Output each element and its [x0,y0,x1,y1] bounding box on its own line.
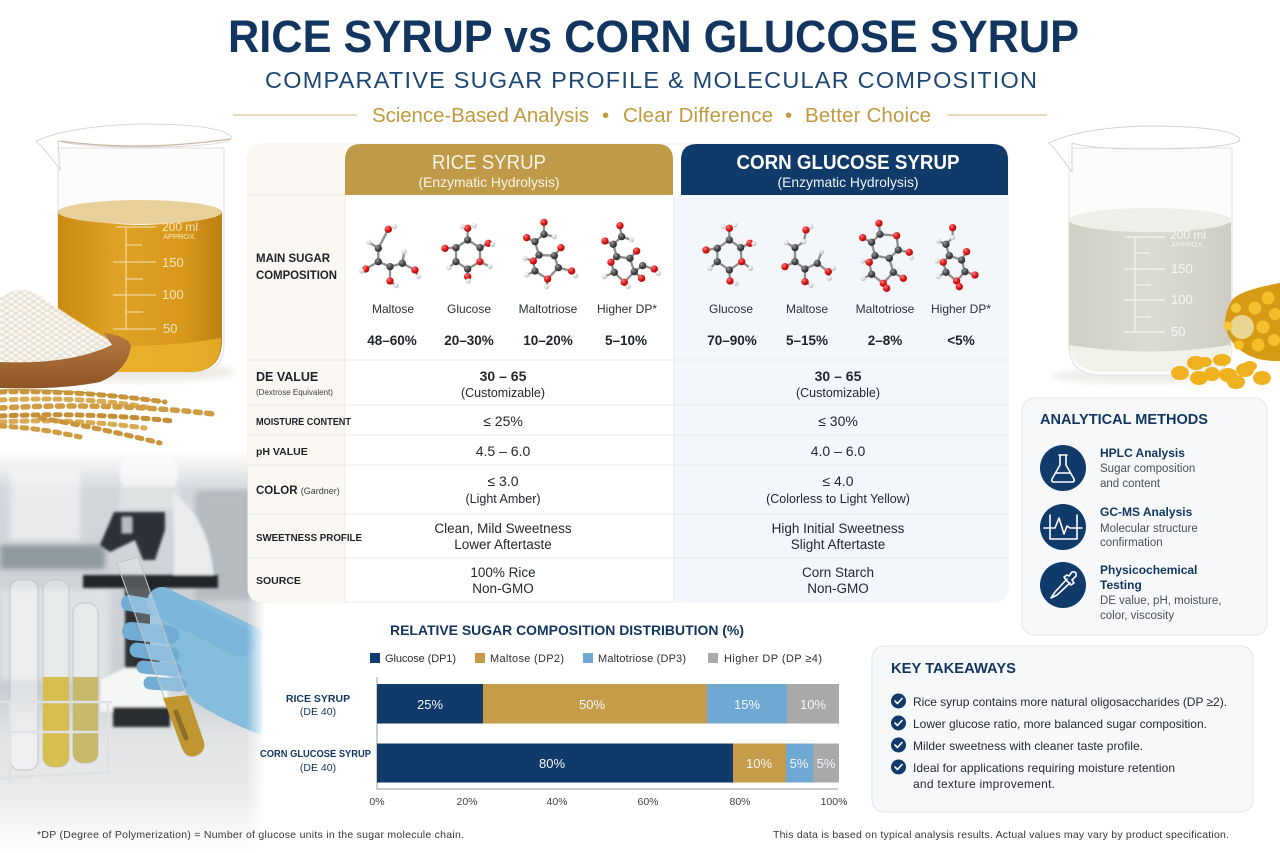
row: moisture content: MOISTURE CONTENT [256,416,351,428]
rice syrup header: RICE SYRUP [432,152,546,174]
bar: rice syrup [377,684,839,724]
sugar names and percentages: 10–20% [523,333,573,348]
corn glucose syrup header [681,144,1008,195]
row labels: CORN GLUCOSE SYRUP [260,748,371,760]
row: sweetness profile: High Initial Sweetness [772,521,905,536]
row: DE value: 30 – 65 [480,368,527,384]
row: source [256,565,874,596]
row: moisture content: ≤ 25% [483,413,523,429]
row: sweetness profile: Lower Aftertaste [454,537,552,552]
takeaway 2: Lower glucose ratio, more balanced sugar composition. [913,717,1207,731]
rice syrup header: (Enzymatic Hydrolysis) [418,174,560,190]
row: source: Non-GMO [472,581,534,596]
icon: flask [1040,445,1086,491]
axis tick labels [369,796,847,808]
molecule: corn higher DP [935,224,979,290]
sugar names and percentages: 20–30% [444,333,494,348]
sugar names and percentages [367,302,991,348]
bar: corn glucose syrup: 80% [539,756,565,771]
molecule: corn maltose [781,224,836,288]
legend: Maltotriose (DP3) [598,653,686,665]
legend: Higher DP (DP ≥4) [724,653,822,665]
tagline [233,104,1047,127]
sugar names and percentages: Higher DP* [597,302,657,316]
subtitle: COMPARATIVE SUGAR PROFILE & MOLECULAR COMPOSITION [265,67,1037,93]
wooden bowl [0,333,131,388]
axis tick labels: 60% [637,796,659,808]
icon: check 3 [891,738,906,752]
row: DE value: DE VALUE [256,370,318,384]
axis tick labels: 80% [729,796,751,808]
row: color [256,473,910,506]
row: pH value: 4.5 – 6.0 [476,443,530,459]
corn cob [1224,283,1280,361]
row: pH value: pH VALUE [256,446,308,458]
row: source: Non-GMO [807,581,869,596]
chart title: RELATIVE SUGAR COMPOSITION DISTRIBUTION (%) [390,623,744,638]
row: sweetness profile: Slight Aftertaste [791,537,885,552]
rice stalks [0,390,214,443]
photo: rice syrup beaker with rice: 200 ml [162,220,198,234]
row: DE value: (Dextrose Equivalent) [256,388,333,397]
bar: corn glucose syrup: 5% [790,756,809,771]
molecule: rice maltose [359,224,421,288]
row: color: ≤ 3.0 [487,473,519,489]
molecule: corn maltotriose [859,220,914,292]
row: pH value: 4.0 – 6.0 [811,443,865,459]
legend [370,653,822,665]
corn glucose syrup header: (Enzymatic Hydrolysis) [778,174,918,190]
panel: key takeaways: KEY TAKEAWAYS [891,660,1016,677]
sugar names and percentages: Maltose [786,302,828,316]
panel: analytical methods: ANALYTICAL METHODS [1040,411,1208,428]
sugar names and percentages: Maltose [372,302,414,316]
bar chart: relative sugar composition distribution [260,623,847,808]
row: moisture content [256,413,858,429]
row: main sugar composition: COMPOSITION [256,270,337,282]
axis tick labels: 0% [369,796,385,808]
bar: corn glucose syrup: 10% [746,756,772,771]
row: DE value [256,368,880,400]
photo: rice syrup beaker with rice: 150 [162,255,184,270]
rice syrup header [345,144,673,195]
row: sweetness profile [256,521,905,552]
title: RICE SYRUP vs CORN GLUCOSE SYRUP [228,11,1079,62]
sugar names and percentages: 5–15% [786,333,828,348]
label column background [248,144,345,602]
axis tick labels: 40% [546,796,568,808]
method: GC-MS [1100,505,1198,549]
photo: rice syrup beaker with rice: 100 [162,287,184,302]
row: source: 100% Rice [470,565,536,580]
photo: rice syrup beaker with rice: APPROX. [163,232,196,241]
photo: corn syrup beaker with corn: 200 ml [1170,228,1206,242]
sugar names and percentages: 5–10% [605,333,647,348]
row: DE value: (Customizable) [461,386,545,400]
axis tick labels: 100% [821,796,847,808]
row: source: SOURCE [256,575,301,587]
method: GC-MS: Molecular structure [1100,523,1198,535]
comparison table [248,144,1008,602]
gloved hand [129,600,262,735]
row: source: Corn Starch [802,565,874,580]
method: physicochemical testing: Testing [1100,578,1142,592]
tagline: Science-Based Analysis [372,104,589,127]
axis tick labels: 20% [456,796,478,808]
corn kernels [1171,354,1271,389]
panel: analytical methods [1022,398,1267,635]
row: DE value: 30 – 65 [815,368,862,384]
row: sweetness profile: SWEETNESS PROFILE [256,532,362,544]
row: main sugar composition [256,219,991,348]
method: HPLC: Sugar composition [1100,463,1195,475]
sugar names and percentages: 48–60% [367,333,417,348]
photo: corn syrup beaker with corn: 50 [1171,324,1185,339]
molecule: rice maltotriose [522,219,578,289]
molecule: rice higher DP [601,222,661,289]
photo: corn syrup beaker with corn: APPROX. [1171,240,1204,249]
photo: corn syrup beaker with corn: 100 [1171,292,1193,307]
axes [377,677,838,789]
bar: rice syrup: 25% [417,697,443,712]
sugar names and percentages: Maltotriose [519,302,578,316]
corn glucose syrup header: CORN GLUCOSE SYRUP [736,152,960,174]
legend: Maltose (DP2) [490,653,564,665]
row: pH value [256,443,865,459]
row labels: (DE 40) [300,706,336,718]
corn column background [674,195,1008,602]
sugar names and percentages: Glucose [447,302,491,316]
icon: dropper [1040,562,1086,608]
footnote: data disclaimer: This data is based on typical analysis results. Actual values may vary by product specification. [773,829,1229,841]
row: color: (Colorless to Light Yellow) [766,492,910,506]
sugar names and percentages: 70–90% [707,333,757,348]
icon: chromatogram [1040,504,1086,550]
sugar names and percentages: Higher DP* [931,302,991,316]
row: color: ≤ 4.0 [822,473,854,489]
test tube rack [0,580,112,785]
takeaway 1: Rice syrup contains more natural oligosaccharides (DP ≥2). [913,695,1227,709]
takeaway 4: Ideal for applications requiring moisture retention [913,761,1175,775]
method: HPLC: HPLC Analysis [1100,446,1185,460]
legend: Glucose (DP1) [385,653,456,665]
row labels [260,693,371,774]
row labels: (DE 40) [300,762,336,774]
photo: corn syrup beaker with corn [1049,126,1280,389]
tagline: Clear Difference [623,104,773,127]
row: moisture content: ≤ 30% [818,413,858,429]
takeaway 4 [913,761,1175,791]
held test tube [117,557,204,756]
takeaway 3: Milder sweetness with cleaner taste profile. [913,739,1143,753]
sugar names and percentages: <5% [947,333,975,348]
photo: corn syrup beaker with corn: 150 [1171,261,1193,276]
method: GC-MS: confirmation [1100,537,1163,549]
row: DE value: (Customizable) [796,386,880,400]
sugar names and percentages: Glucose [709,302,753,316]
photo: laboratory with microscope and gloved hand [0,458,262,829]
takeaway 4: and texture improvement. [913,777,1055,791]
molecule: corn glucose [702,222,757,286]
photo: rice syrup beaker with rice: 50 [163,321,177,336]
method: physicochemical testing: Physicochemical [1100,563,1197,577]
bar: rice syrup: 10% [800,697,826,712]
method: physicochemical testing: color, viscosity [1100,610,1174,622]
method: HPLC [1100,446,1195,490]
rice pile [0,290,118,365]
method: HPLC: and content [1100,478,1161,490]
icon: check 2 [891,716,906,730]
row: color: (Light Amber) [465,492,541,506]
tagline: Better Choice [805,104,931,127]
method: physicochemical testing [1100,563,1221,622]
molecule: rice glucose [441,223,495,284]
method: GC-MS: GC-MS Analysis [1100,505,1193,519]
bar: corn glucose syrup [377,744,839,782]
row: color: COLOR (Gardner) [256,485,340,497]
bar: rice syrup: 15% [734,697,760,712]
method: physicochemical testing: DE value, pH, moisture, [1100,595,1221,607]
tagline: • [785,104,792,127]
bar: corn glucose syrup: 5% [817,756,836,771]
icon: check 1 [891,694,906,708]
tagline: • [602,104,609,127]
panel: key takeaways [872,646,1253,812]
icon: check 4 [891,760,906,774]
row: main sugar composition: MAIN SUGAR [256,253,331,265]
footnote: DP definition: *DP (Degree of Polymerization) = Number of glucose units in the sugar molecule chain. [37,829,464,841]
bar: rice syrup: 50% [579,697,605,712]
row: sweetness profile: Clean, Mild Sweetness [434,521,572,536]
photo: rice syrup beaker with rice [0,124,235,443]
row labels: RICE SYRUP [286,693,350,705]
sugar names and percentages: 2–8% [868,333,902,348]
sugar names and percentages: Maltotriose [856,302,915,316]
